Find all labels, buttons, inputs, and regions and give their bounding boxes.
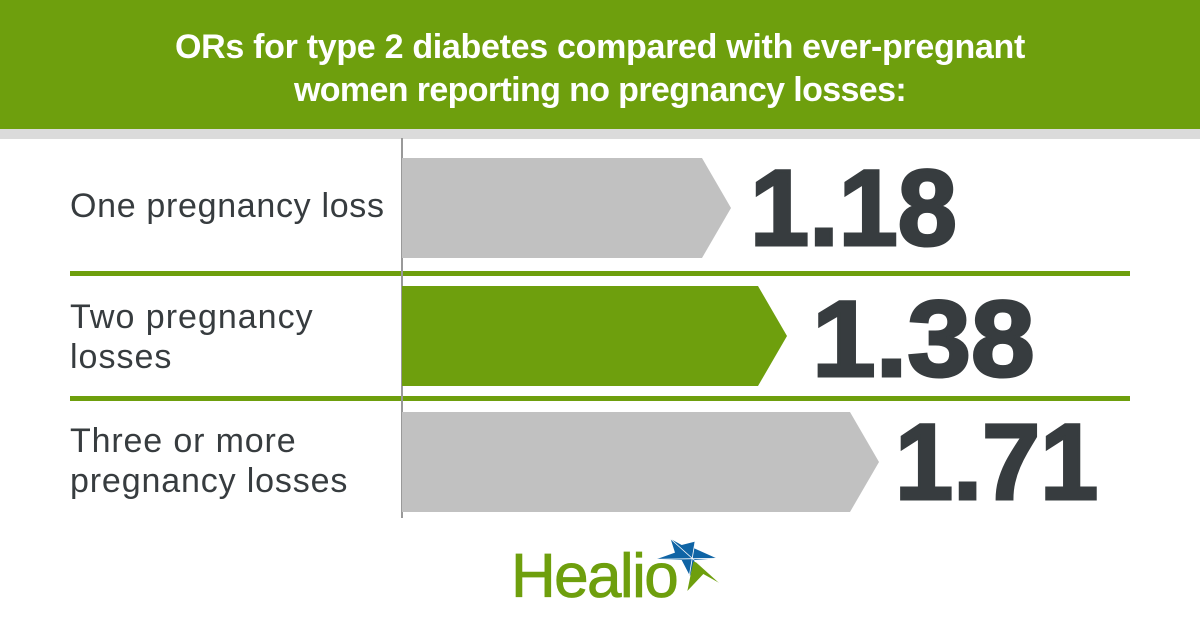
label: two pregnancy losses: Two pregnancy <box>70 298 314 336</box>
label: three or more pregnancy losses: pregnancy losses <box>70 462 348 500</box>
label: three or more pregnancy losses: Three or more <box>70 422 296 460</box>
vertical axis <box>401 138 402 518</box>
bar: three or more pregnancy losses <box>402 412 879 512</box>
logo wordmark: Healio <box>511 542 677 611</box>
label: one pregnancy loss: One pregnancy loss <box>70 187 385 225</box>
bar: two pregnancy losses <box>402 286 787 386</box>
title: women reporting no pregnancy losses: <box>294 71 906 109</box>
label: two pregnancy losses <box>70 298 314 376</box>
row dividers <box>70 271 1130 401</box>
value: 1.38: 1.38 <box>812 278 1035 399</box>
bar: one pregnancy loss <box>402 158 731 258</box>
value: 1.18: 1.18 <box>750 147 957 268</box>
value: 1.71: 1.71 <box>895 401 1098 522</box>
icon: star <box>657 539 719 591</box>
label: three or more pregnancy losses <box>70 422 348 500</box>
header band <box>0 0 1200 139</box>
label: two pregnancy losses: losses <box>70 338 172 376</box>
title <box>175 28 1025 109</box>
Healio logo <box>511 539 719 611</box>
title: ORs for type 2 diabetes compared with ever-pregnant <box>175 28 1025 66</box>
